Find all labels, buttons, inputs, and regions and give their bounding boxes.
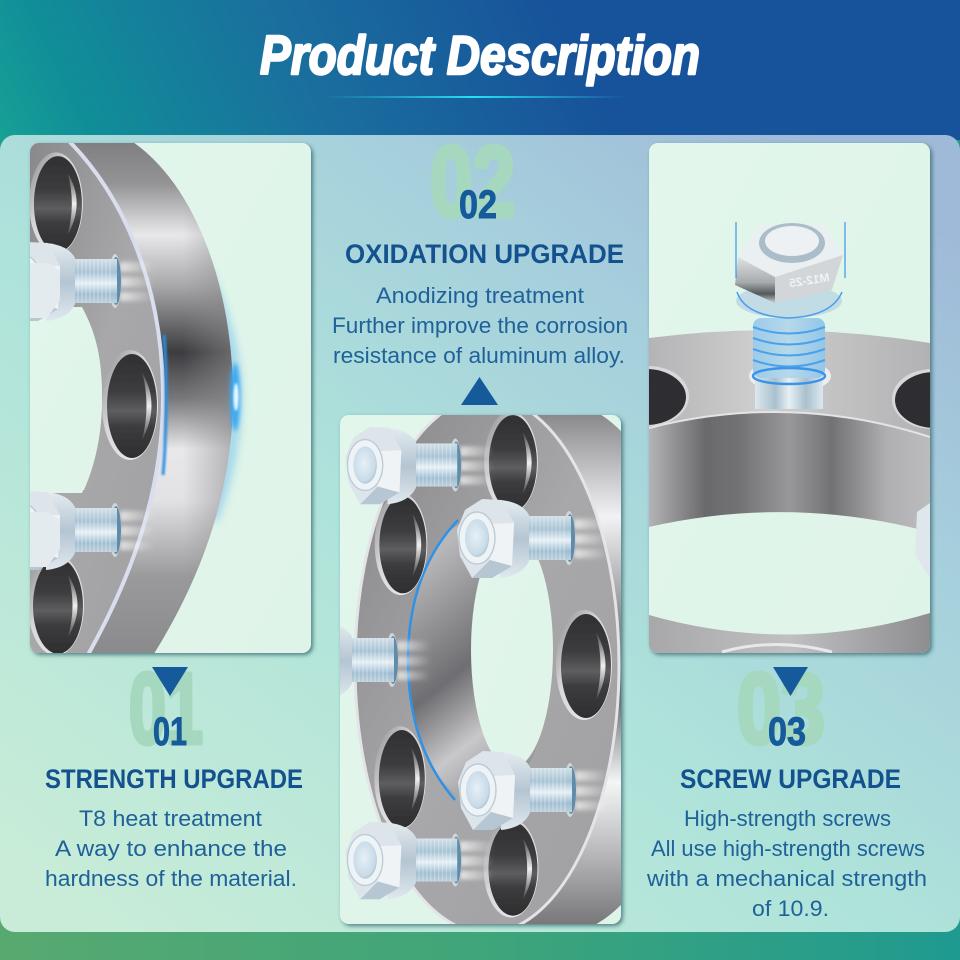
blue glow: outer edge [205, 270, 236, 520]
text: screw description [646, 806, 927, 921]
text: strength description [45, 806, 297, 891]
panel: strength image [3, 133, 311, 660]
title: Product Description [260, 24, 700, 86]
blue rim highlight [163, 335, 166, 475]
triangle: 02 up [461, 377, 498, 405]
hole: right [892, 369, 930, 429]
heading: oxidation upgrade: OXIDATION UPGRADE [345, 239, 624, 269]
number: 01 [129, 653, 203, 765]
wheel spacer: side band [74, 143, 232, 653]
bolt holes [28, 152, 158, 656]
number: 01: 01 [129, 653, 203, 765]
wheel spacer: side band [524, 415, 621, 924]
inner wall [410, 524, 536, 790]
text: screw description: of 10.9. [752, 896, 829, 921]
rim line [63, 135, 163, 660]
number: 01: 01 [153, 710, 187, 754]
text: screw description: High-strength screws [684, 806, 891, 831]
disc: rim highlight [649, 412, 930, 437]
triangle: 01 down [152, 667, 188, 696]
blue inner edge [408, 520, 458, 800]
lower hole edge [722, 644, 832, 652]
number: 03: 03 [768, 710, 806, 754]
number: 03: 03 [737, 653, 825, 765]
blue spark [230, 363, 240, 431]
disc: side band [649, 412, 930, 532]
bolts [280, 427, 609, 899]
number: 02: 02 [459, 183, 497, 227]
heading: screw upgrade: SCREW UPGRADE [680, 764, 901, 794]
partial bolt at right edge [915, 503, 930, 578]
disc: top face [649, 330, 930, 437]
text: oxidation description: Anodizing treatment [376, 283, 584, 308]
text: strength description: T8 heat treatment [79, 806, 262, 831]
hole: left [649, 366, 689, 426]
text: screw description: All use high-strength screws [651, 836, 925, 861]
panel: oxidation image [339, 414, 626, 929]
heading: strength upgrade: STRENGTH UPGRADE [45, 764, 303, 794]
bolt holes [374, 411, 612, 918]
screw marking: M12-25 [788, 270, 830, 290]
bolts [30, 242, 149, 570]
rim line [355, 397, 619, 933]
text: strength description: hardness of the material. [45, 866, 297, 891]
screw [735, 222, 845, 409]
text: strength description: A way to enhance the [55, 836, 287, 861]
text: oxidation description [332, 283, 628, 368]
triangle: 03 down [773, 667, 808, 696]
panel: screw image [648, 142, 935, 658]
text: screw description: with a mechanical strength [646, 866, 927, 891]
band outer shading [190, 218, 232, 555]
wheel spacer: front face [355, 397, 619, 933]
disc: lower section [649, 613, 930, 653]
centre bore [471, 560, 553, 762]
text: oxidation description: resistance of aluminum alloy. [333, 343, 625, 368]
wheel spacer: front face [30, 143, 161, 653]
title underline [322, 96, 626, 98]
number: 02: 02 [430, 126, 515, 238]
text: oxidation description: Further improve the corrosion [332, 313, 628, 338]
bore background [83, 383, 102, 490]
